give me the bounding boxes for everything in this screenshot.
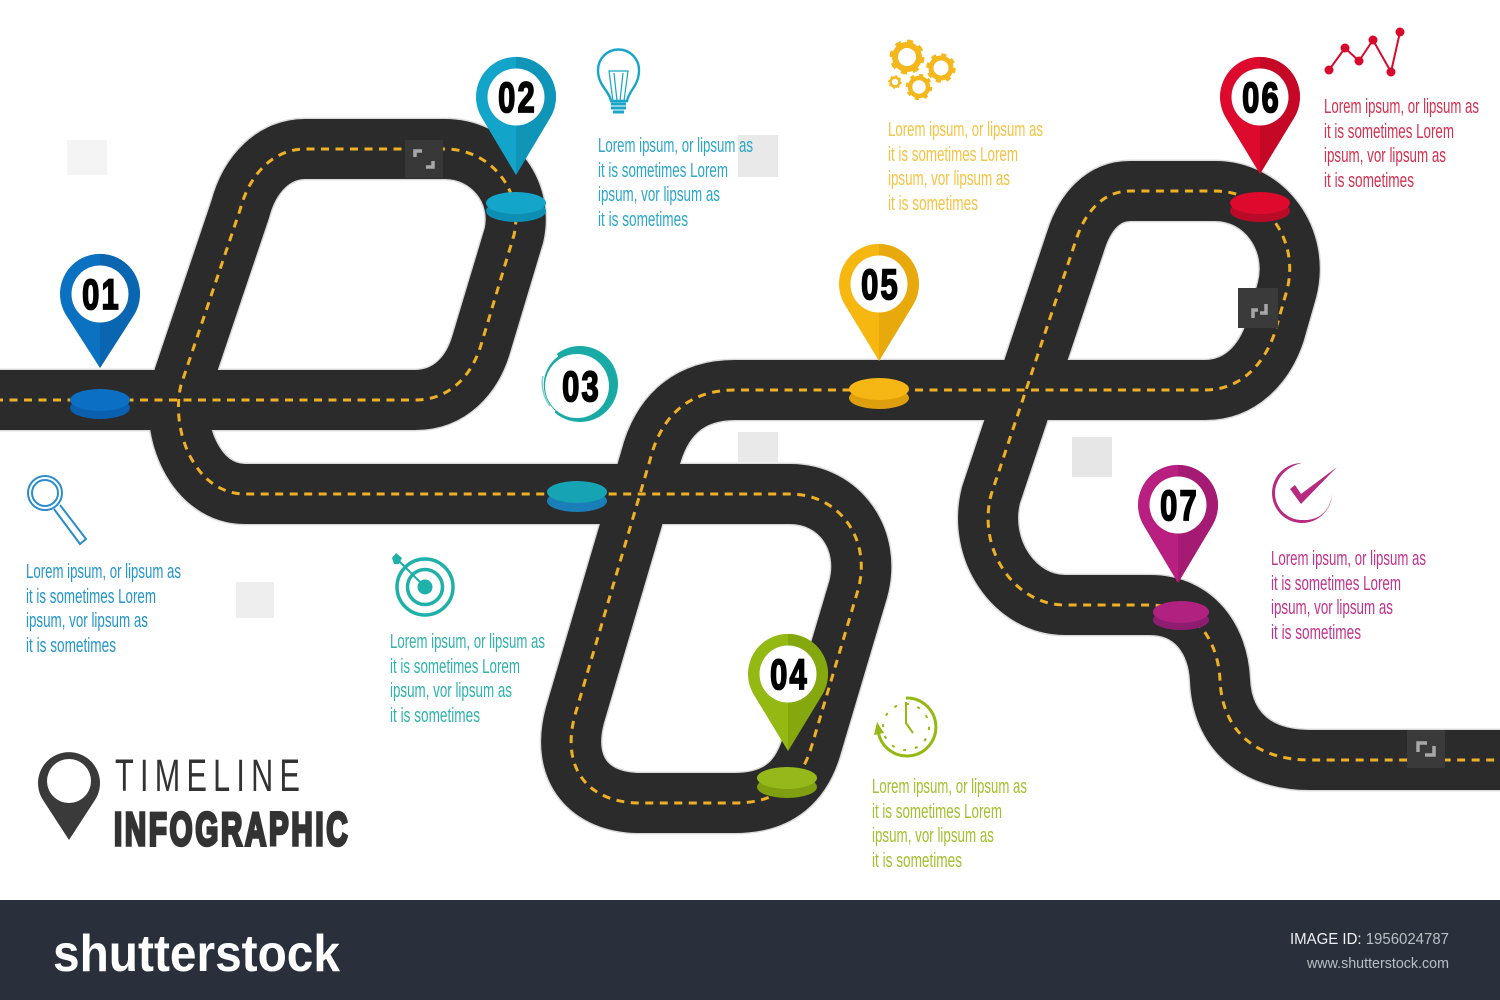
icon: check mark xyxy=(1272,463,1337,523)
text block 06: it is sometimes xyxy=(1324,170,1414,192)
icon: magnifier xyxy=(28,476,86,544)
marker disc 05 xyxy=(849,378,909,409)
footer logo: shutterstock xyxy=(53,925,340,983)
text block 05: it is sometimes Lorem xyxy=(888,144,1018,166)
text block 07: ipsum, vor lipsum as xyxy=(1271,597,1393,619)
marker disc 06 xyxy=(1230,192,1290,222)
text block 03: Lorem ipsum, or lipsum as xyxy=(390,631,545,653)
pin 04 xyxy=(748,634,828,751)
marker disc 01 xyxy=(70,389,130,419)
text block 03 xyxy=(390,631,545,727)
text block 03: ipsum, vor lipsum as xyxy=(390,680,512,702)
pin 02 xyxy=(476,57,556,175)
text block 01 xyxy=(26,561,181,657)
title: TIMELINE xyxy=(115,751,300,802)
pin 01 xyxy=(60,254,140,368)
road xyxy=(0,149,1500,803)
footer bar xyxy=(0,900,1500,1000)
pin 02: 02 xyxy=(498,73,537,121)
pin 01: 01 xyxy=(82,270,121,318)
text block 05: it is sometimes xyxy=(888,193,978,215)
marker disc 04 xyxy=(757,767,817,798)
title pin icon xyxy=(38,752,100,840)
text block 02: it is sometimes Lorem xyxy=(598,160,728,182)
text block 07: it is sometimes Lorem xyxy=(1271,573,1401,595)
text block 01: Lorem ipsum, or lipsum as xyxy=(26,561,181,583)
title xyxy=(114,751,348,856)
text block 05 xyxy=(888,119,1043,215)
marker disc 02 xyxy=(486,192,546,222)
pin 06 xyxy=(1220,57,1300,174)
text block 07: it is sometimes xyxy=(1271,622,1361,644)
pin 03 ring xyxy=(540,346,618,422)
pin 04: 04 xyxy=(770,650,809,698)
text block 03: it is sometimes Lorem xyxy=(390,656,520,678)
text block 01: ipsum, vor lipsum as xyxy=(26,610,148,632)
text block 07: Lorem ipsum, or lipsum as xyxy=(1271,548,1426,570)
pin 03 ring: 03 xyxy=(562,362,601,410)
text block 04: Lorem ipsum, or lipsum as xyxy=(872,776,1027,798)
title: INFOGRAPHIC xyxy=(114,805,348,856)
text block 02: it is sometimes xyxy=(598,209,688,231)
text block 02 xyxy=(598,135,753,231)
text block 04: it is sometimes xyxy=(872,850,962,872)
text block 05: ipsum, vor lipsum as xyxy=(888,168,1010,190)
text block 04: it is sometimes Lorem xyxy=(872,801,1002,823)
pin 05: 05 xyxy=(861,260,900,308)
pin 07: 07 xyxy=(1160,481,1199,529)
icon: target xyxy=(392,553,453,615)
footer url: www.shutterstock.com xyxy=(1306,956,1449,972)
marker disc 03 xyxy=(547,481,607,512)
marker disc 07 xyxy=(1153,601,1209,630)
icon: gears xyxy=(889,42,954,98)
text block 06 xyxy=(1324,96,1479,192)
text block 05: Lorem ipsum, or lipsum as xyxy=(888,119,1043,141)
text block 04: ipsum, vor lipsum as xyxy=(872,825,994,847)
text block 04 xyxy=(872,776,1027,872)
icon: light bulb xyxy=(598,49,639,112)
icon: clock xyxy=(874,698,936,756)
text block 01: it is sometimes xyxy=(26,635,116,657)
text block 07 xyxy=(1271,548,1426,644)
text block 02: Lorem ipsum, or lipsum as xyxy=(598,135,753,157)
pin 06: 06 xyxy=(1242,73,1281,121)
text block 03: it is sometimes xyxy=(390,705,480,727)
icon: line chart xyxy=(1325,28,1404,76)
pin 07 xyxy=(1138,465,1218,583)
footer image id: IMAGE ID: 1956024787 xyxy=(1290,931,1449,948)
text block 01: it is sometimes Lorem xyxy=(26,586,156,608)
text block 02: ipsum, vor lipsum as xyxy=(598,184,720,206)
pin 05 xyxy=(839,244,919,361)
watermark tiles xyxy=(67,135,1445,768)
